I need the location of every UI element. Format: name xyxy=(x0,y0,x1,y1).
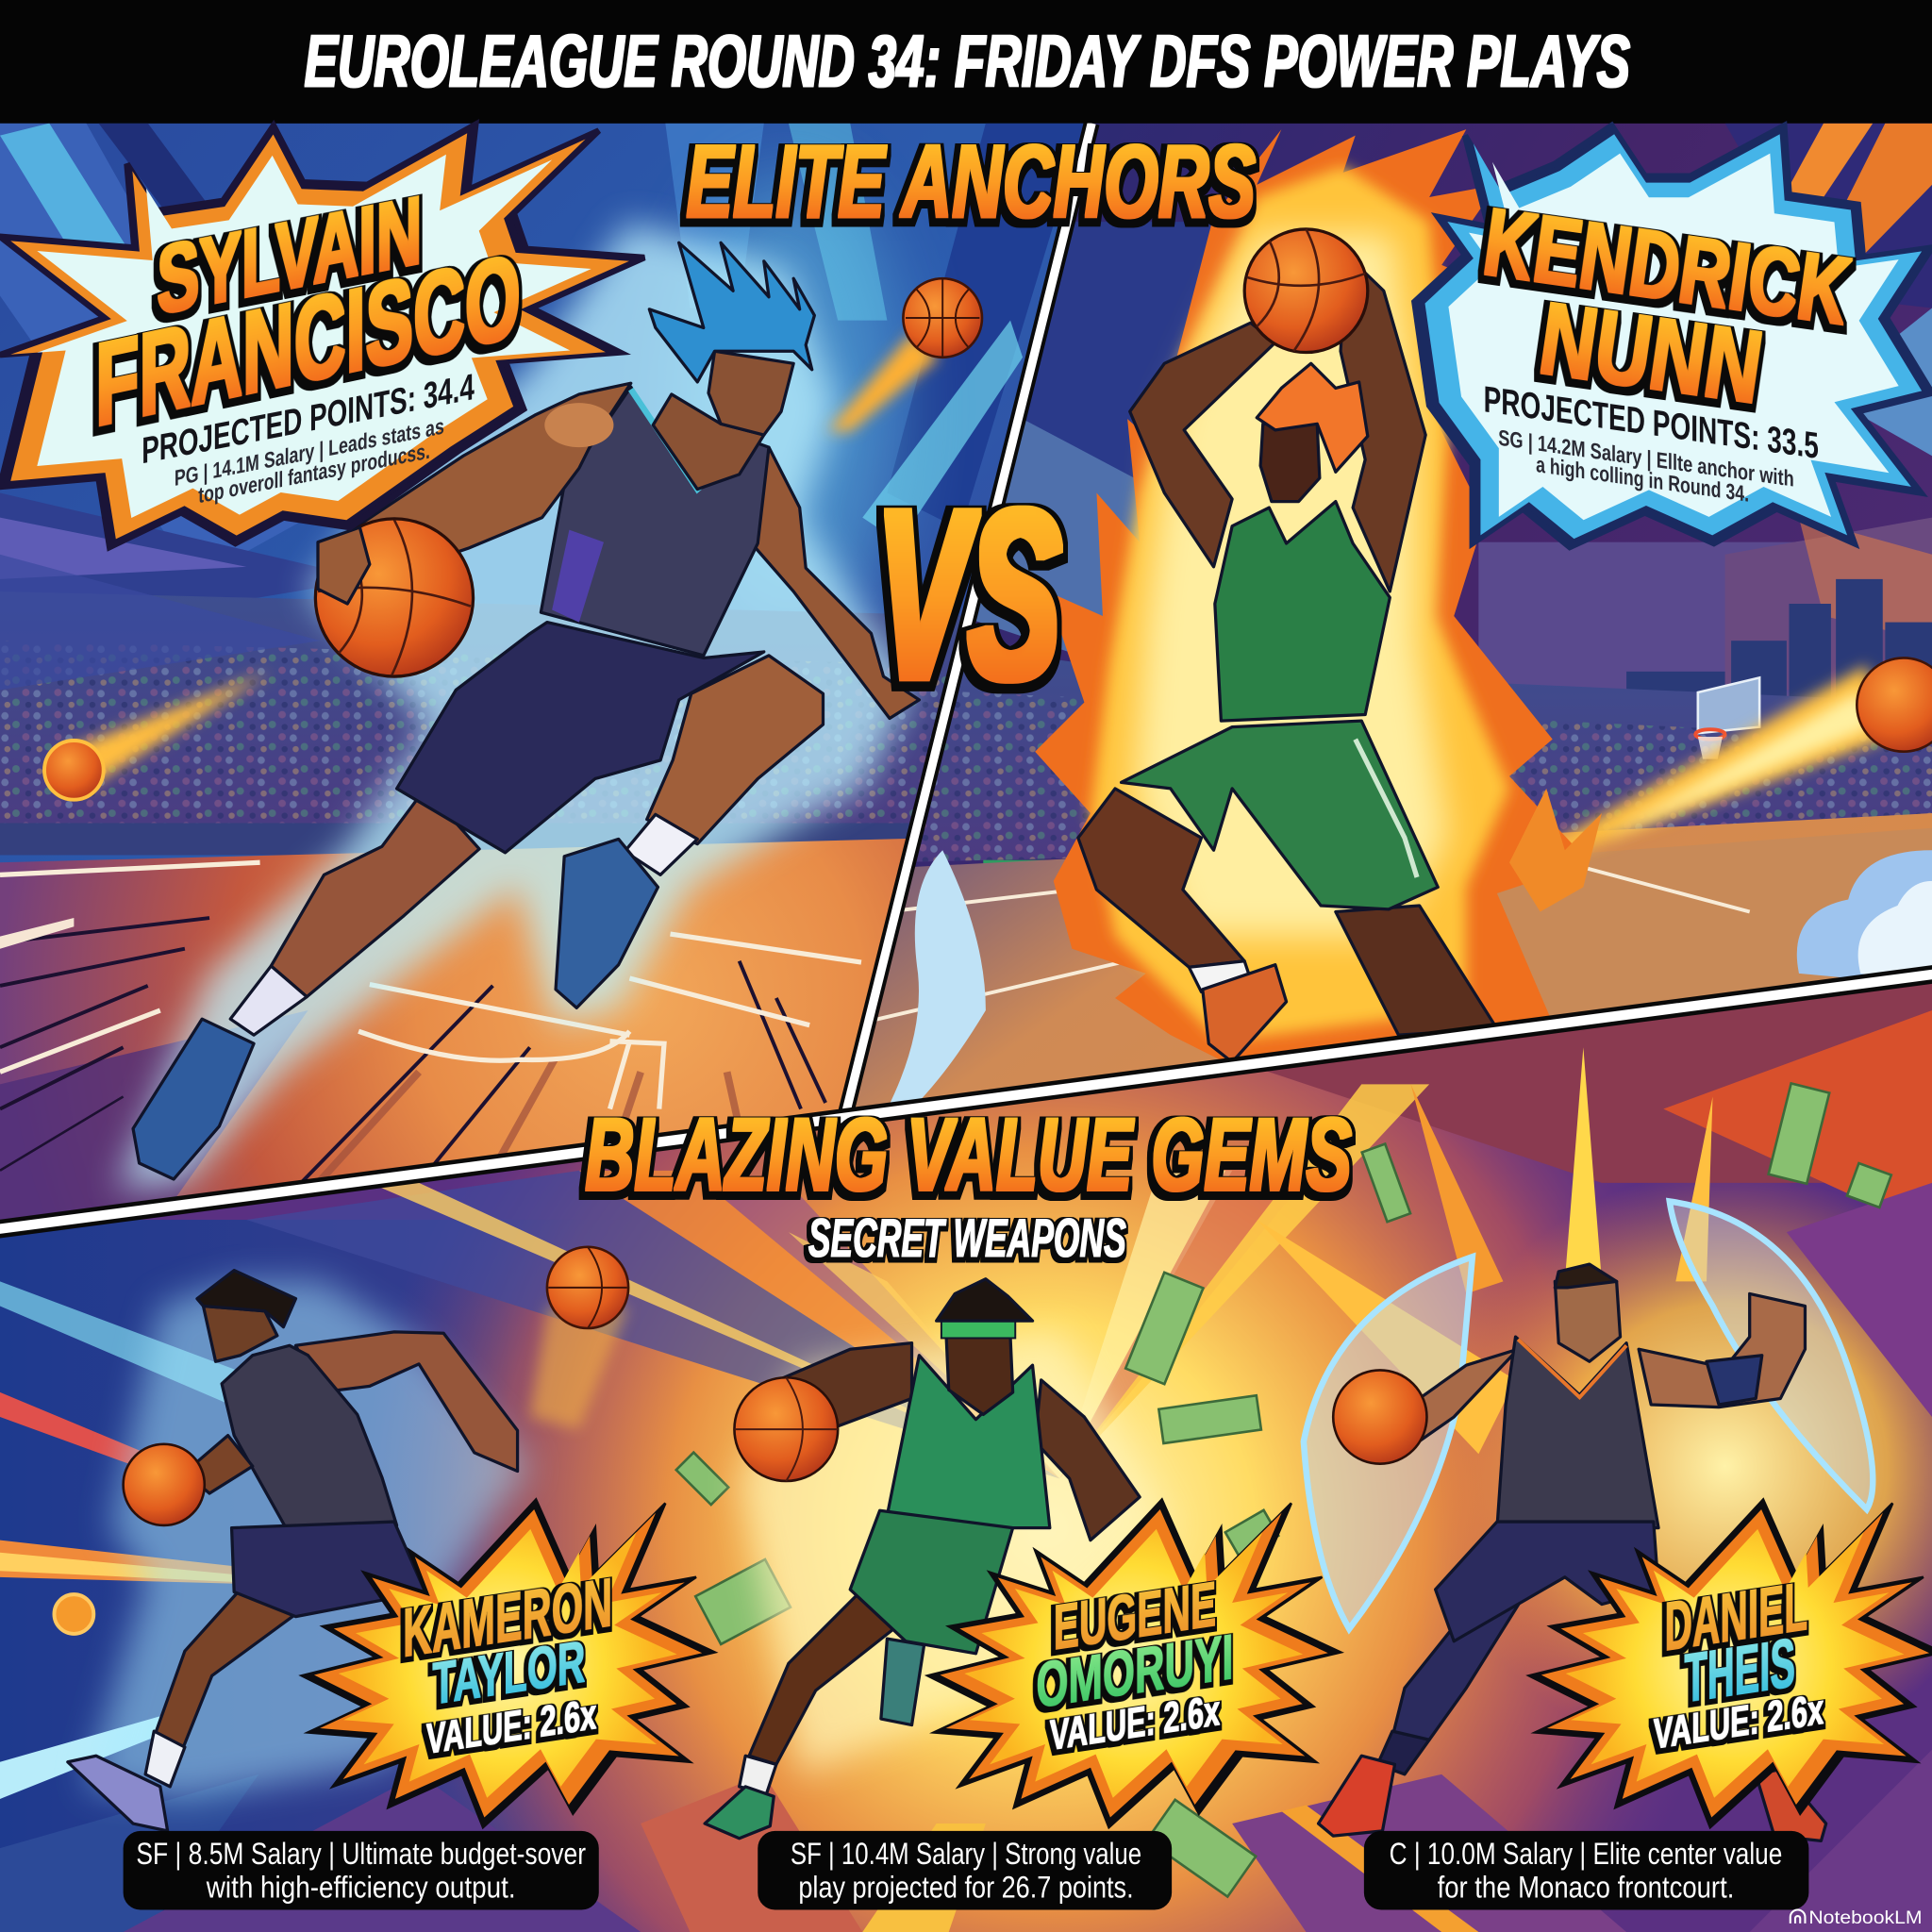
comet basketball xyxy=(530,1247,628,1429)
heading: Blazing Value Gems: BLAZING VALUE GEMS xyxy=(585,1098,1352,1213)
callout: Kendrick Nunn xyxy=(1414,125,1932,547)
info pill: Daniel Theis: for the Monaco frontcourt. xyxy=(1438,1869,1734,1904)
callout: Kendrick Nunn: a high colling in Round 34. xyxy=(1536,453,1749,508)
callout: Kameron Taylor xyxy=(302,1500,715,1827)
callout: Kameron Taylor: TAYLOR xyxy=(432,1629,585,1718)
info pill: Eugene Omoruyi: play projected for 26.7 points. xyxy=(798,1869,1134,1904)
panel: value gems artwork xyxy=(0,974,1932,1932)
callout: Eugene Omoruyi xyxy=(928,1500,1341,1827)
info pill: Daniel Theis xyxy=(1364,1831,1808,1909)
city skyline xyxy=(1626,579,1932,697)
small fireball xyxy=(54,1594,93,1634)
watermark: NotebookLM: NotebookLM xyxy=(1808,1907,1923,1928)
info pill: Daniel Theis: C | 10.0M Salary | Elite center value xyxy=(1390,1836,1782,1871)
info pill: Kameron Taylor: SF | 8.5M Salary | Ultimate budget-sover xyxy=(136,1836,586,1871)
callout: Daniel Theis xyxy=(1529,1500,1932,1827)
callout: Sylvain Francisco: top overoll fantasy producss. xyxy=(198,440,430,508)
panel: Sylvain Francisco artwork xyxy=(0,124,1096,1232)
callout: Sylvain Francisco: FRANCISCO xyxy=(95,228,521,451)
name: SYLVAIN xyxy=(158,175,422,335)
callout: Sylvain Francisco xyxy=(0,125,644,547)
crowd stands xyxy=(917,660,1932,864)
basketball court floor xyxy=(0,838,937,1232)
player: Kendrick Nunn xyxy=(1078,229,1497,1062)
VS badge: VS xyxy=(876,459,1061,729)
player: Sylvain Francisco xyxy=(133,242,919,1179)
comet basketball right xyxy=(1558,657,1932,853)
panel: Kendrick Nunn artwork xyxy=(838,124,1932,1122)
callout: Kameron Taylor: VALUE: 2.6x xyxy=(426,1689,596,1763)
blue spiked hair xyxy=(649,242,814,382)
dividers xyxy=(0,124,1932,1230)
heading: Elite Anchors: ELITE ANCHORS xyxy=(687,125,1256,240)
comet basketball lower xyxy=(44,672,271,800)
callout: Daniel Theis: THEIS xyxy=(1684,1624,1795,1718)
basketball court floor xyxy=(838,813,1932,1122)
callout: Daniel Theis: DANIEL xyxy=(1665,1566,1807,1666)
info pill: Kameron Taylor: with high-efficiency output. xyxy=(206,1869,516,1904)
electric aura xyxy=(117,222,912,1189)
player: Kameron Taylor xyxy=(68,1271,530,1831)
subheading: Secret Weapons: SECRET WEAPONS xyxy=(808,1208,1126,1269)
info pill: Eugene Omoruyi xyxy=(758,1831,1172,1909)
callout: Kendrick Nunn: NUNN xyxy=(1541,280,1761,426)
info pill: Eugene Omoruyi: SF | 10.4M Salary | Strong value xyxy=(791,1836,1141,1871)
details: PG | 14.1M Salary | Leads stats as xyxy=(175,415,444,491)
icon: basketball hoop xyxy=(1695,677,1759,759)
player: Daniel Theis xyxy=(1304,1201,1873,1840)
light rays xyxy=(0,1047,1713,1932)
callout: Daniel Theis: VALUE: 2.6x xyxy=(1654,1684,1824,1758)
info pill: Kameron Taylor xyxy=(124,1831,599,1909)
player: Eugene Omoruyi xyxy=(705,1279,1171,1839)
comet basketball upper xyxy=(828,278,982,431)
crowd stands xyxy=(0,555,986,855)
callout: Eugene Omoruyi: OMORUYI xyxy=(1036,1621,1233,1722)
flames xyxy=(1035,129,1602,1059)
callout: Kameron Taylor: KAMERON xyxy=(403,1563,612,1672)
callout: Eugene Omoruyi: EUGENE xyxy=(1054,1568,1216,1664)
header bar xyxy=(0,0,1932,124)
money bills xyxy=(676,1083,1891,1897)
clouds xyxy=(887,850,1932,1109)
details: SG | 14.2M Salary | Ellte anchor with xyxy=(1498,426,1794,492)
projected points: PROJECTED POINTS: 34.4 xyxy=(142,366,475,472)
callout: Eugene Omoruyi: VALUE: 2.6x xyxy=(1050,1685,1220,1759)
